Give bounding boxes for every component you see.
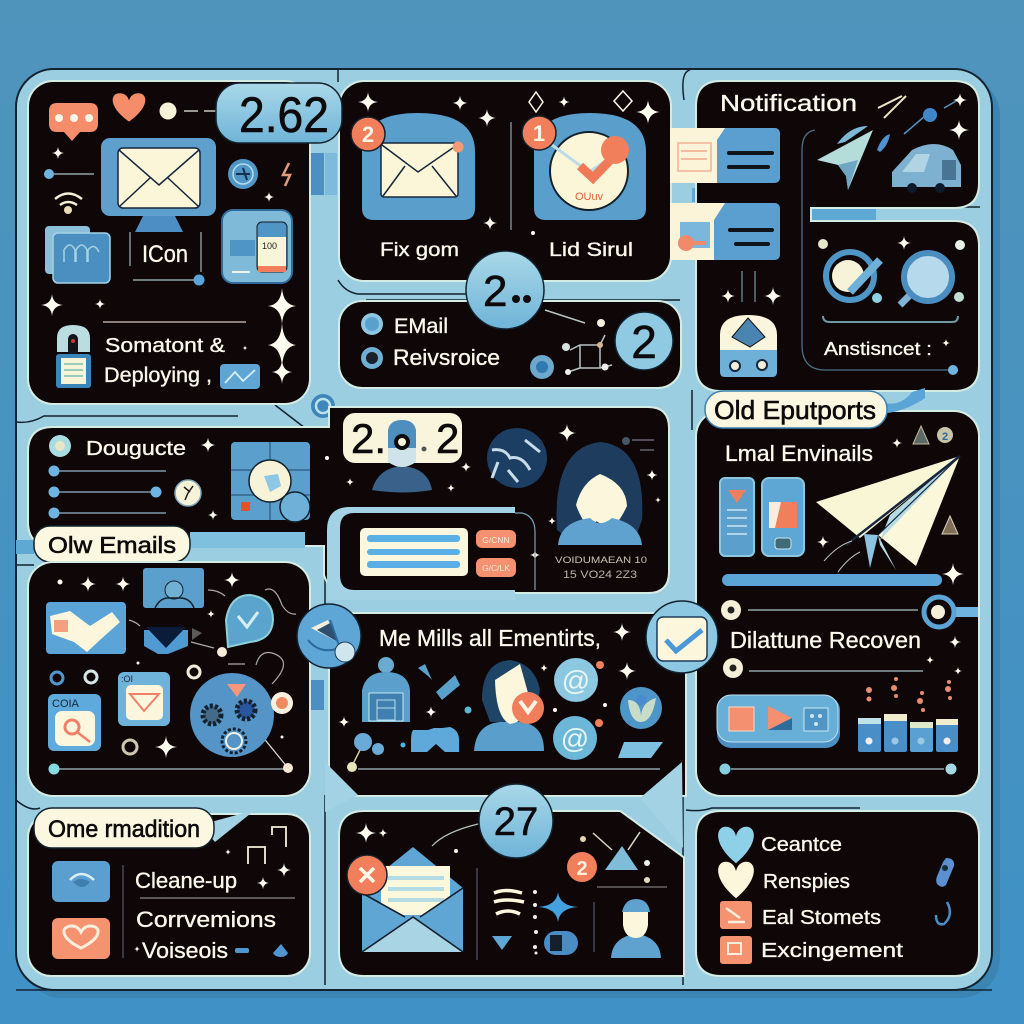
divider [510,122,512,230]
icon: magnifier [900,253,952,305]
icon: open envelope [347,847,463,952]
icon: rocket plane [817,126,890,190]
icon: phone left [720,478,754,556]
list card [360,528,468,576]
thin lines [742,271,755,302]
icon: phone right [762,478,804,556]
badge: 2.. [466,251,544,329]
icon: clip [936,858,954,887]
timeline [48,763,293,774]
icon: at sign: @ [562,665,590,696]
pill: Old Eputports: Old Eputports [714,395,876,425]
icon: person [611,899,661,958]
icon: envelope card [118,672,170,726]
icon: lock [56,325,91,388]
small rings [51,666,200,754]
icon: chat bubble [49,103,98,141]
floating card: form [670,128,780,183]
icon: capsule [544,931,578,955]
heading: Lmal Envinails: Lmal Envinails [725,441,873,466]
icon: profile card [143,568,204,608]
slider [44,169,94,179]
thin bracket [802,130,950,370]
caption: 15 VO24 2Z3 [563,569,637,581]
icon: dark envelope [144,627,202,654]
pill: Olw Emails: Olw Emails [48,532,176,558]
label: Eal Stomets: Eal Stomets [762,907,881,929]
stars [721,93,969,347]
text block: Somatont & Deploying: Deploying , [104,364,212,387]
dash and drop [235,944,288,957]
icon: email dot [361,313,383,335]
icon: tablet [231,442,310,522]
connector ring [311,394,335,418]
badge: check [646,601,718,673]
stars [41,147,296,384]
badge: 2: 2 [631,316,657,368]
slider bottom [723,658,923,678]
stars [356,823,458,853]
orange button: G/C/LK [482,563,510,573]
icon: COIA card [48,694,101,751]
heading: Notification: Notification [720,90,857,116]
panel: bottom envelope [340,812,683,975]
badge: 2 [615,312,673,370]
icon: orange tile [720,936,752,964]
sub dots [818,239,965,375]
stars [338,623,636,728]
connectors [129,589,296,768]
text block: Somatont & Deploying [104,335,226,387]
icon: hook [936,902,950,924]
icon: molecule network [530,310,612,379]
label: Reivsroice: Reivsroice [393,345,500,370]
divider [593,902,595,952]
icon: envelope tile [351,113,475,220]
slider top [721,597,978,627]
icon: vehicle [892,144,961,193]
panel: list buttons [327,507,535,600]
label: Anstisncet: Anstisncet : [824,338,932,359]
panel: email and services [340,302,680,387]
icon: check magnifier [826,252,880,300]
panel: old eputports [697,412,978,795]
pill: Olw Emails [34,526,305,562]
connector: right tail [640,762,683,848]
caption: VOIDUMAEAN 10 [555,555,647,566]
bracket line [823,316,958,322]
icon: diamond [492,936,512,950]
cream dot [217,647,227,657]
thin curve [432,824,478,846]
icon: at sign [554,658,604,702]
icon: folder [45,226,110,283]
vertical rule [122,865,124,958]
stars [817,536,964,675]
icon: device card: 100 [262,241,277,251]
label: ICon: ICon [142,241,188,268]
orange button: G/CNN [482,535,510,545]
divider [476,868,478,960]
rule [597,886,667,888]
icon: map card [46,602,126,654]
icon: clock [175,480,201,506]
figure: woman with check [474,660,544,751]
panel: cleanup [29,815,309,975]
pill: Ome rmadition: Ome rmadition [48,816,200,843]
icon: orange tile [720,901,752,929]
dots column [533,890,538,954]
progress bar [722,574,942,586]
icon: envelope tile: 2 [362,122,374,147]
squiggles [494,890,524,914]
icon: cans [858,714,958,752]
caption [555,555,647,581]
panel: dougucte and profile [29,408,668,592]
panel: notification [697,82,978,390]
stars [134,849,291,952]
icon: tent [580,832,650,883]
label: Ceantce: Ceantce [761,834,842,856]
icon: chart button [220,364,260,389]
divider [103,321,246,323]
stars [58,572,284,758]
label: Fix gom: Fix gom [380,240,459,261]
icon: blue star [538,892,578,922]
icon: lightning [283,163,290,186]
label: Voiseois: Voiseois [142,938,228,963]
badge: 2.0.2 with avatar: 2 [436,415,459,462]
icon: gears globe [190,673,274,757]
slider end [720,764,956,774]
icon: robot box [720,315,777,377]
pill: Old Eputports [705,388,925,428]
icon: device card [222,210,292,283]
badge: 27 [479,784,553,858]
badge: 2.0.2 with avatar [343,413,462,492]
icon: monitor with envelope [101,138,216,232]
icon: tools [418,664,460,700]
decor lines and pin [878,96,958,134]
orange button [476,530,516,548]
pill: Ome rmadition [34,808,255,848]
icon: bubbles [347,706,472,772]
icon: dial [49,435,71,457]
icon: cream heart [718,862,754,898]
icon: person badge [620,687,662,729]
icon: service dot [361,347,383,369]
timeline [358,768,660,770]
stars [200,424,661,560]
icon: COIA card: COIA [52,698,80,710]
badge: 27: 27 [494,800,538,844]
icon: envelope flap [618,742,663,758]
icon: check tile: 1 [533,121,545,146]
label: Lid Sirul: Lid Sirul [549,240,633,261]
badge: gem circle [297,604,361,668]
panel: olw emails icons [29,563,309,795]
connector dot [160,102,216,120]
icon: check tile: OUuv [575,191,604,203]
tiny marks [622,437,654,450]
music marks [248,827,286,864]
badge: orange 2 [567,852,597,882]
icon: globe [487,428,547,488]
connector: left tail [325,762,358,812]
icon: round badge [228,159,258,189]
icon: gamepad [411,727,459,752]
icon: orange circle [271,692,293,714]
button: eye [52,861,110,902]
pill: 2.62: 2.62 [239,87,329,143]
orange button [476,558,516,577]
rule [140,897,295,899]
heading: Dilattune Recoven: Dilattune Recoven [730,627,921,653]
badge: orange 2: 2 [576,858,588,880]
small marks [892,426,953,448]
panel: bottom list [697,812,978,975]
figure: woman portrait [557,442,642,545]
sliders [48,466,166,518]
label: Dougucte: Dougucte [86,438,186,460]
icon: wifi [55,194,82,214]
panel: me mills [330,614,685,795]
icon: person with box [362,657,410,722]
media button [717,695,840,748]
floating card: key [670,203,780,260]
panel: top-left icon [29,82,309,403]
label: ICon [130,232,204,286]
icon: paper plane [816,456,960,570]
scattered sparks [866,677,952,712]
icon: at sign [553,716,603,760]
icon: speech badge [226,595,273,647]
badge: 2.0.2 with avatar: 2. [351,415,386,462]
icon: heart [113,93,145,122]
icon: envelope card: :OI [121,674,133,684]
stars [358,91,660,235]
heading: Me Mills all Ementirts: Me Mills all Ementirts, [379,625,601,651]
motion lines [824,541,860,572]
icon: blue heart [718,827,754,863]
icon: check tile [522,113,646,220]
icon: at sign: @ [561,723,589,754]
button: heart [52,918,110,959]
panel: top-middle [340,82,670,280]
label: Cleane-up: Cleane-up [135,868,237,893]
label: EMail: EMail [394,315,448,338]
label: Renspies: Renspies [763,871,850,893]
marker: 2-note [942,516,958,534]
label: Excingement: Excingement [761,940,904,962]
small marks: 2 [942,431,948,443]
text block: Somatont & Deploying: Somatont & [105,335,226,357]
label: Corrvemions: Corrvemions [136,907,276,932]
badge: 2..: 2 [483,267,507,316]
